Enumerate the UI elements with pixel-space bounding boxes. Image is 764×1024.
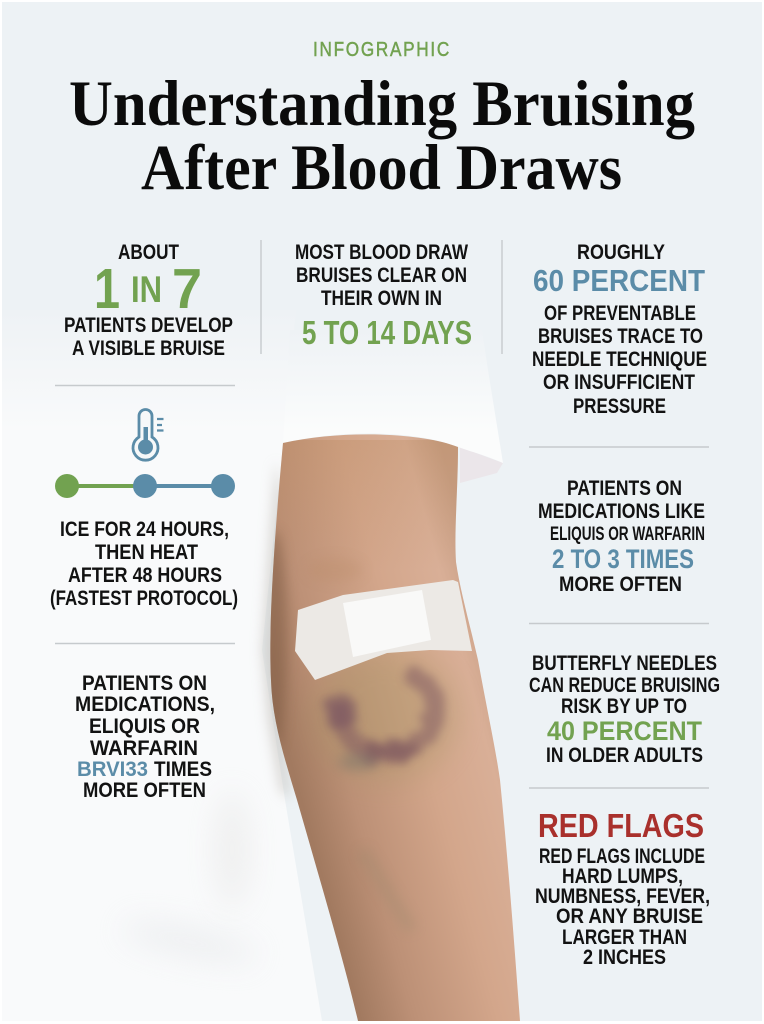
text: patients on medications left: BRVI33 bbox=[77, 758, 148, 781]
stat: 1 in 7: A VISIBLE BRUISE bbox=[72, 337, 225, 360]
text: ice then heat: AFTER 48 HOURS bbox=[68, 564, 222, 587]
title: Understanding Bruising bbox=[69, 68, 695, 140]
bandage bbox=[295, 580, 472, 680]
text: patients on medications right bbox=[538, 477, 705, 596]
text: red flags: RED FLAGS bbox=[538, 807, 704, 844]
stat: 1 in 7: PATIENTS DEVELOP bbox=[64, 314, 233, 337]
stat: 60 percent: ROUGHLY bbox=[577, 241, 665, 264]
sleeve bbox=[283, 330, 503, 483]
stat: 1 in 7: ABOUT bbox=[118, 241, 179, 264]
text: patients on medications left bbox=[75, 672, 215, 802]
text: ice then heat: ICE FOR 24 HOURS, bbox=[60, 518, 229, 541]
stat: 1 in 7: IN bbox=[131, 269, 162, 310]
text: patients on medications left: WARFARIN bbox=[90, 737, 198, 760]
title: After Blood Draws bbox=[141, 132, 622, 204]
text: patients on medications left: MEDICATIONS, bbox=[75, 693, 215, 716]
text: ice then heat: (FASTEST PROTOCOL) bbox=[50, 587, 238, 610]
text: butterfly needles: BUTTERFLY NEEDLES bbox=[532, 652, 717, 675]
text: patients on medications left: MORE OFTEN bbox=[83, 779, 206, 802]
text: butterfly needles bbox=[529, 652, 720, 767]
eyebrow: infographic: INFOGRAPHIC bbox=[313, 39, 451, 61]
text: patients on medications right: 2 TO 3 TIMES bbox=[552, 544, 694, 574]
text: patients on medications left: PATIENTS ON bbox=[82, 672, 207, 695]
text: red flags: 2 INCHES bbox=[583, 946, 666, 969]
text: butterfly needles: 40 PERCENT bbox=[547, 716, 702, 746]
text: red flags: HARD LUMPS, bbox=[562, 865, 683, 888]
text: butterfly needles: IN OLDER ADULTS bbox=[546, 744, 703, 767]
text: butterfly needles: RISK BY UP TO bbox=[561, 695, 687, 718]
text: red flags bbox=[535, 807, 710, 969]
stat: 60 percent: 60 PERCENT bbox=[533, 263, 705, 298]
text: patients on medications right: ELIQUIS OR WARFARIN bbox=[550, 524, 705, 545]
text: ice then heat: THEN HEAT bbox=[95, 541, 198, 564]
text: patients on medications right: MORE OFTEN bbox=[559, 573, 682, 596]
text: ice then heat bbox=[50, 518, 238, 610]
stat: 5 to 14 days bbox=[295, 241, 472, 351]
stat: 5 to 14 days: BRUISES CLEAR ON bbox=[296, 264, 467, 287]
stat: 60 percent: BRUISES TRACE TO bbox=[538, 325, 703, 348]
stat: 1 in 7: 1 bbox=[94, 257, 120, 321]
timeline bbox=[55, 474, 235, 498]
bruise bbox=[313, 649, 457, 781]
icon: thermometer bbox=[133, 410, 164, 460]
stat: 5 to 14 days: THEIR OWN IN bbox=[321, 287, 442, 310]
text: patients on medications left: ELIQUIS OR bbox=[89, 715, 200, 738]
stat: 5 to 14 days: 5 TO 14 DAYS bbox=[302, 314, 472, 351]
title bbox=[69, 68, 695, 204]
text: red flags: NUMBNESS, FEVER, bbox=[535, 885, 710, 908]
text: patients on medications right: MEDICATIONS LIKE bbox=[538, 500, 705, 523]
text: patients on medications left: TIMES bbox=[154, 758, 212, 781]
stat: 5 to 14 days: MOST BLOOD DRAW bbox=[295, 241, 468, 264]
text: patients on medications right: PATIENTS ON bbox=[567, 477, 682, 500]
stat: 60 percent: NEEDLE TECHNIQUE bbox=[532, 348, 707, 371]
text: red flags: LARGER THAN bbox=[562, 926, 687, 949]
shirt body bbox=[2, 310, 322, 1021]
stat: 60 percent: PRESSURE bbox=[573, 395, 666, 418]
stat: 1 in 7 bbox=[64, 241, 233, 360]
dividers bbox=[55, 240, 709, 788]
stat: 60 percent bbox=[532, 241, 707, 418]
stat: 1 in 7: 7 bbox=[172, 257, 202, 321]
text: red flags: RED FLAGS INCLUDE bbox=[539, 845, 705, 868]
arm bbox=[263, 434, 520, 1021]
text: red flags: OR ANY BRUISE bbox=[556, 905, 703, 928]
stat: 60 percent: OF PREVENTABLE bbox=[544, 302, 696, 325]
stat: 60 percent: OR INSUFFICIENT bbox=[543, 371, 695, 394]
